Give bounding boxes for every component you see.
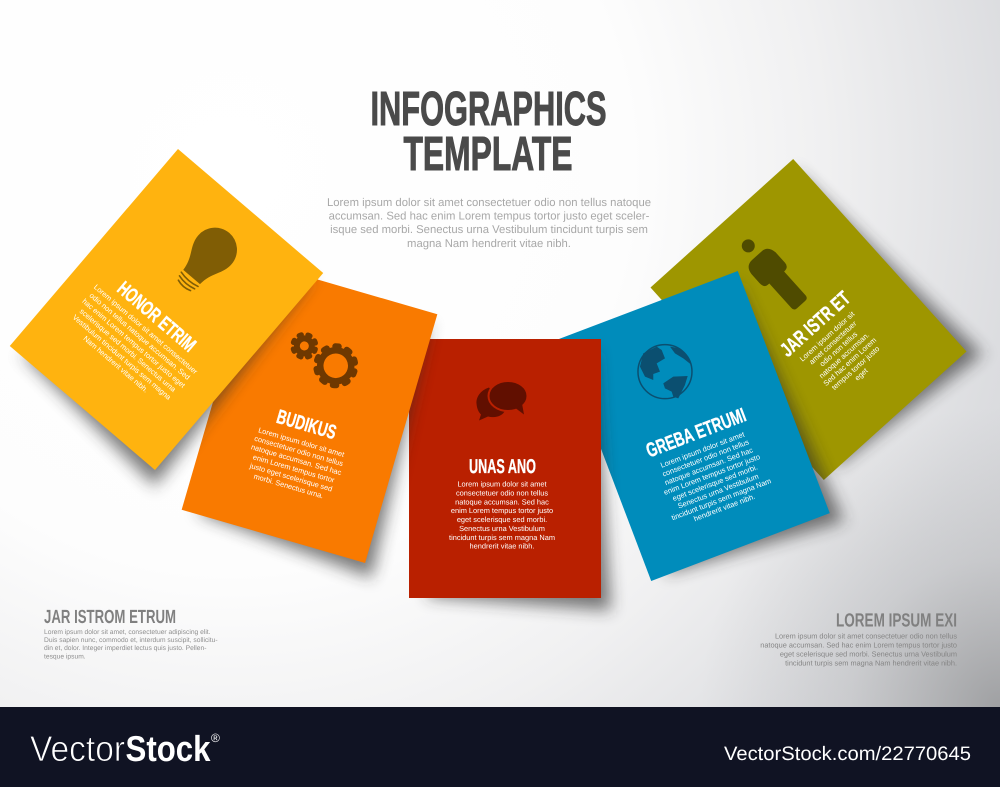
title bbox=[370, 83, 606, 181]
heading: HONOR ETRIM bbox=[113, 278, 200, 357]
body text: enim Lorem tempus tortor justo bbox=[662, 452, 761, 497]
body text: Senectus urna Vestibulum bbox=[459, 524, 545, 533]
intro text bbox=[327, 197, 651, 250]
body text: odio non tellus natoque accumsan. Sed bbox=[88, 291, 192, 382]
bottom left heading: JAR ISTROM ETRUM bbox=[44, 607, 176, 628]
intro text: accumsan. Sed hac enim Lorem tempus tortor justo eget sceler- bbox=[329, 210, 650, 222]
body text: tincidunt turpis sem magna Nam bbox=[670, 476, 772, 522]
body text: Lorem ipsum dolor sit amet consectetuer bbox=[92, 282, 200, 376]
footer logo: Vector bbox=[30, 728, 125, 769]
panel: yellow card bbox=[2, 149, 331, 486]
title: INFOGRAPHICS bbox=[370, 83, 606, 136]
body text: morbi. Senectus urna. bbox=[253, 472, 325, 500]
body text bbox=[651, 427, 776, 531]
body text: Lorem ipsum dolor sit bbox=[798, 309, 856, 363]
body text: Nam hendrerit vitae nibh. bbox=[82, 334, 150, 394]
bottom right text bbox=[760, 632, 957, 668]
heading: GREBA ETRUMI bbox=[643, 404, 749, 462]
panel: red card bbox=[409, 339, 611, 610]
icon: light bulb bbox=[167, 219, 246, 301]
bottom right note bbox=[760, 610, 957, 668]
body text bbox=[798, 309, 890, 401]
body text bbox=[449, 480, 555, 551]
body text: Lorem ipsum dolor sit amet bbox=[257, 425, 345, 459]
panel: orange card bbox=[178, 261, 447, 578]
body text: hac enim Lorem tempus tortor justo eget bbox=[80, 297, 187, 390]
bottom right text: Lorem ipsum dolor sit amet consectetuer odio non tellus bbox=[775, 632, 957, 640]
body text: consectetuer odio non tellus bbox=[661, 437, 750, 479]
intro text: Lorem ipsum dolor sit amet consectetuer odio non tellus natoque bbox=[327, 197, 651, 209]
body text: natoque accumsan. bbox=[817, 330, 871, 380]
body text: Lorem ipsum dolor sit amet bbox=[457, 480, 547, 488]
footer logo bbox=[30, 728, 220, 769]
body text: Lorem ipsum dolor sit amet bbox=[659, 430, 746, 470]
bottom left text bbox=[44, 629, 218, 660]
body text: eget bbox=[853, 366, 870, 382]
bottom right text: eget scelerisque sed morbi. Senectus urna Vestibulum bbox=[780, 650, 957, 658]
bottom left text: Lorem ipsum dolor sit amet, consectetuer adipiscing elit. bbox=[44, 629, 211, 636]
bottom right text: tincidunt turpis sem magna Nam hendrerit vitae nibh. bbox=[785, 658, 957, 668]
body text: hendrerit vitae nibh. bbox=[470, 542, 534, 551]
bottom left note bbox=[44, 607, 218, 660]
body text: natoque accumsan. Sed hac bbox=[663, 445, 754, 487]
panel: blue card bbox=[559, 267, 844, 593]
footer logo: ® bbox=[211, 731, 220, 745]
icon: person bbox=[732, 230, 813, 316]
footer logo: Stock bbox=[126, 728, 211, 769]
body text: natoque accumsan. Sed hac bbox=[455, 497, 549, 506]
body text: hendrerit vitae nibh. bbox=[692, 492, 756, 523]
icon: globe bbox=[638, 345, 692, 399]
body text: Vestibulum tincidunt turpis sem magna bbox=[71, 313, 174, 402]
body text: Sed hac enim Lorem bbox=[821, 336, 878, 388]
heading: BUDIKUS bbox=[274, 406, 339, 444]
panel: olive card bbox=[651, 152, 982, 489]
body text: enim Lorem tempus tortor bbox=[252, 452, 336, 485]
intro text: isque sed morbi. Senectus urna Vestibulum tincidunt turpis sem bbox=[330, 224, 648, 236]
body text: tincidunt turpis sem magna Nam bbox=[449, 533, 555, 542]
body text: enim Lorem tempus tortor justo bbox=[451, 506, 553, 515]
title: TEMPLATE bbox=[404, 128, 572, 181]
body text: Senectus urna Vestibulum bbox=[676, 472, 760, 510]
footer bar bbox=[0, 707, 1000, 787]
bottom left text: Duis sapien nunc, commodo et, interdum suscipit, sollicitu- bbox=[44, 637, 218, 644]
heading: UNAS ANO bbox=[469, 456, 536, 478]
bottom left text: din et, dolor. Integer imperdiet lectus quis justo. Pellen- bbox=[44, 645, 206, 652]
bottom right text: natoque accumsan. Sed hac enim Lorem tempus tortor justo bbox=[760, 640, 957, 650]
heading: JAR ISTR ET bbox=[776, 288, 855, 361]
body text bbox=[62, 282, 200, 411]
footer id: VectorStock.com/22770645 bbox=[724, 743, 971, 765]
body text: odio non tellus bbox=[818, 330, 859, 368]
body text: justo eget scelerisque sed bbox=[248, 461, 333, 494]
bottom left text: tesque ipsum. bbox=[44, 654, 86, 660]
body text: consectetuer odio non tellus bbox=[456, 488, 548, 497]
body text: amet consectetuer bbox=[807, 319, 859, 366]
body text: tempus tortor justo bbox=[830, 344, 881, 392]
body text: scelerisque sed morbi. Senectus urna bbox=[78, 307, 178, 394]
icon: speech bubbles bbox=[476, 381, 528, 420]
body text: eget scelerisque sed morbi. bbox=[671, 462, 759, 503]
icon: gears bbox=[285, 332, 361, 390]
body text: eget scelerisque sed morbi. bbox=[457, 515, 547, 524]
body text bbox=[242, 425, 348, 503]
intro text: magna Nam hendrerit vitae nibh. bbox=[407, 238, 571, 250]
body text: consectetuer odio non tellus bbox=[253, 434, 345, 468]
body text: natoque accumsan. Sed hac bbox=[250, 442, 343, 477]
